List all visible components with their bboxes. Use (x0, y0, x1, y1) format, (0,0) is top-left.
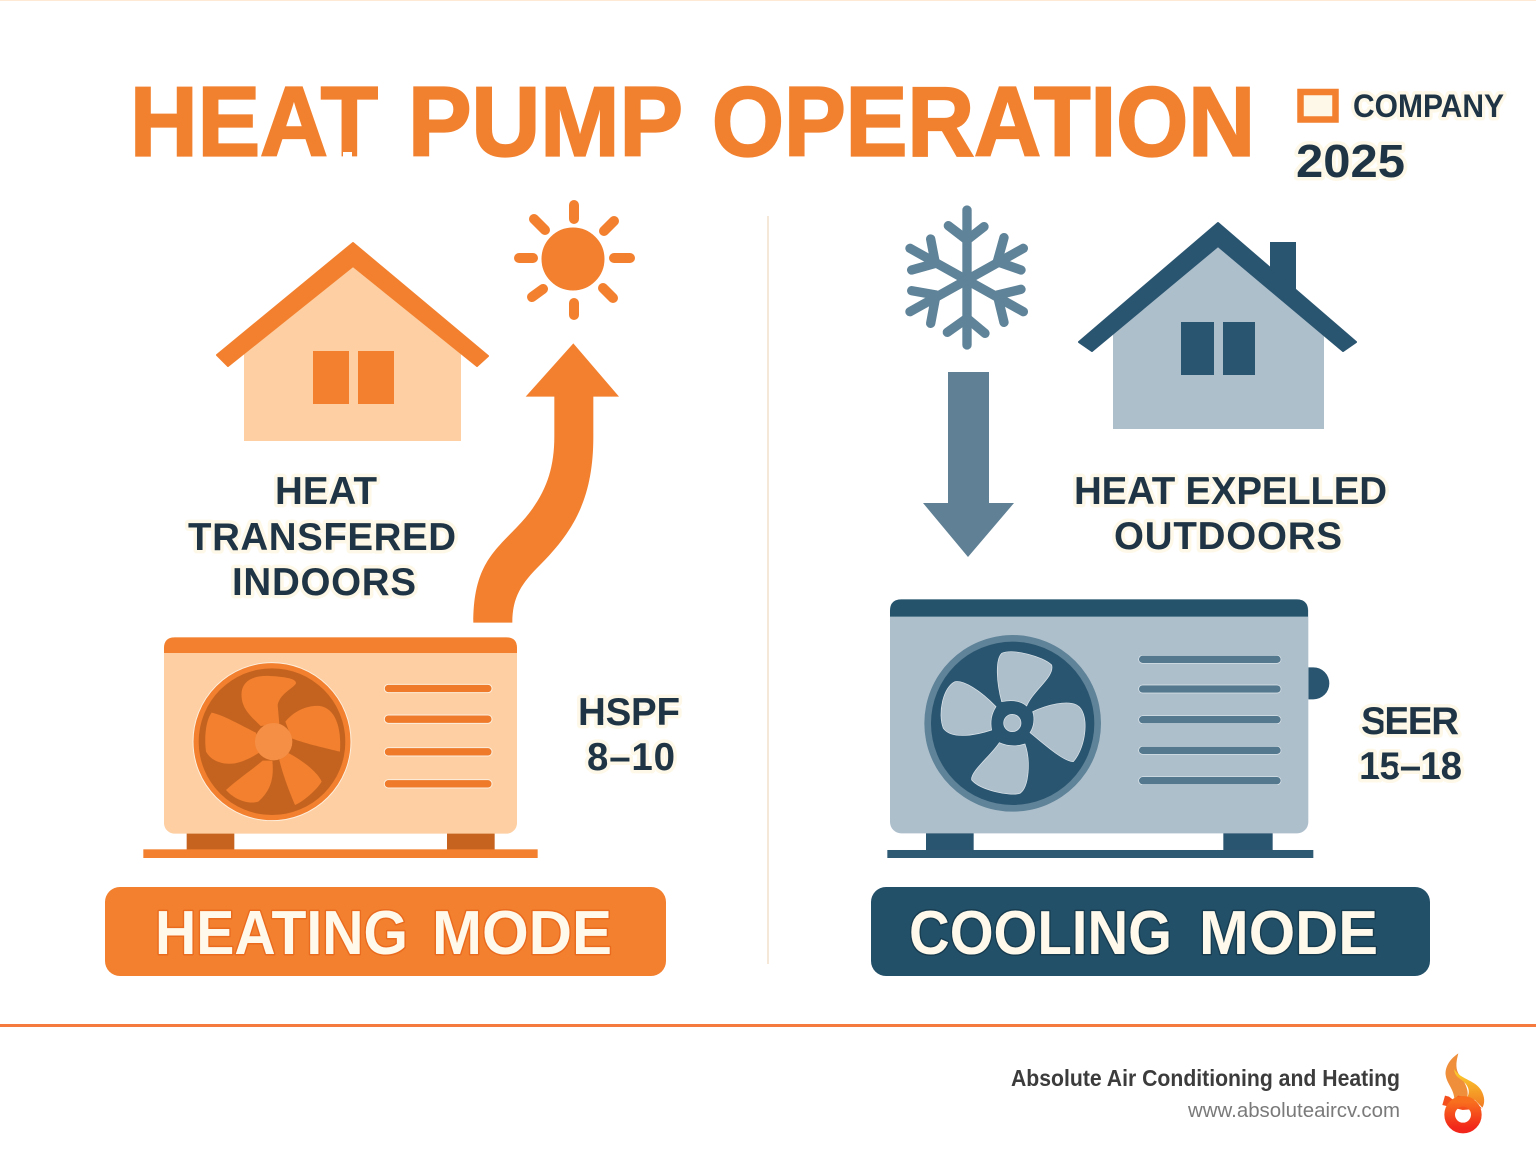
arrow: heat expelled downward (923, 372, 1014, 557)
banner: heating mode: MODE (432, 899, 612, 968)
text: heat expelled outdoors: OUTDOORS (1114, 515, 1342, 558)
text: heat expelled outdoors (1074, 470, 1387, 558)
arrow: heat rising (473, 343, 619, 623)
banner: cooling mode: MODE (1199, 899, 1378, 968)
icon: flame logo (1442, 1053, 1484, 1128)
title: HEAT (130, 67, 378, 177)
metric: HSPF: HSPF (578, 691, 680, 734)
text: heat transferred indoors: TRANSFERED (188, 516, 456, 559)
text: heat transferred indoors: HEAT (275, 470, 377, 513)
icon: snowflake (910, 210, 1023, 345)
icon: sun (519, 205, 630, 315)
footer: company details: www.absoluteaircv.com (1187, 1100, 1400, 1122)
icon: company square (1300, 92, 1336, 120)
heat pump unit: cooling (887, 599, 1329, 858)
year: 2025 (1296, 135, 1405, 187)
panel: cooling mode (871, 210, 1462, 976)
banner: heating mode: HEATING (155, 899, 408, 968)
footer: company details: Absolute Air Conditioning and Heating (1011, 1065, 1400, 1091)
text: heat transferred indoors: INDOORS (232, 561, 416, 604)
panel: heating mode (105, 205, 680, 976)
banner: heating mode (105, 887, 666, 976)
metric: HSPF: 8–10 (587, 736, 675, 779)
banner: cooling mode: COOLING (909, 899, 1172, 968)
footer: company details (1011, 1065, 1400, 1122)
metric: HSPF (578, 691, 680, 779)
icon: cooled house (1079, 223, 1356, 429)
banner: cooling mode (871, 887, 1430, 976)
text: heat expelled outdoors: HEAT EXPELLED (1074, 470, 1387, 513)
company badge (1300, 88, 1504, 124)
heat pump unit: heating (143, 637, 538, 858)
metric: SEER: SEER (1361, 700, 1459, 743)
title: PUMP (408, 67, 683, 177)
icon: heated house (217, 243, 488, 441)
company label: COMPANY (1353, 88, 1504, 124)
metric: SEER (1359, 700, 1462, 788)
metric: SEER: 15–18 (1359, 745, 1462, 788)
text: heat transferred indoors (188, 470, 456, 604)
title (130, 67, 1255, 177)
title: OPERATION (712, 67, 1255, 177)
